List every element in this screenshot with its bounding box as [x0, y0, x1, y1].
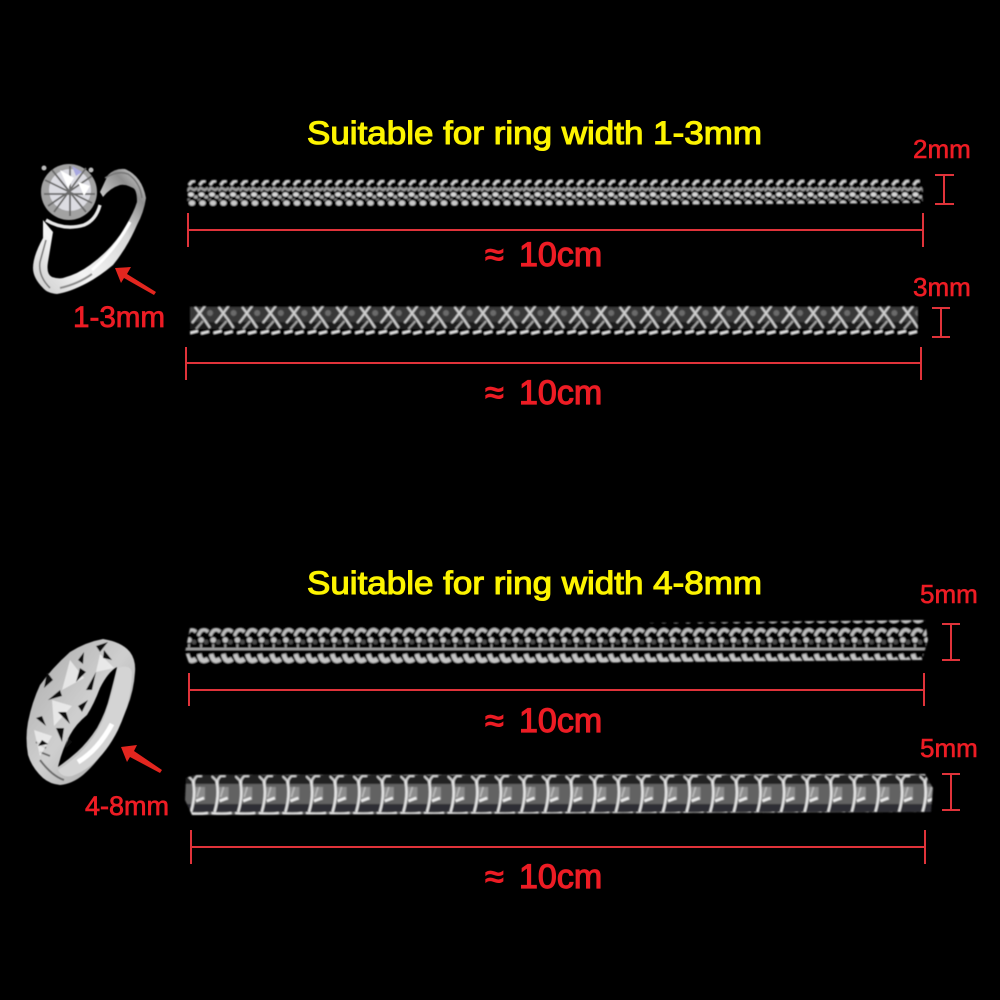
- spring: second 5mm: [185, 774, 933, 815]
- dimension: 2mm height: [935, 175, 954, 204]
- label: second 5mm: 5mm: [920, 733, 978, 763]
- label: about 10cm: 10cm: [519, 858, 602, 896]
- label: 2mm: 2mm: [913, 134, 971, 164]
- label: about 10cm: 10cm: [519, 702, 602, 740]
- label: first 5mm: 5mm: [920, 579, 978, 609]
- dimension: first 5mm height: [942, 624, 960, 660]
- label: about 10cm: 10cm: [519, 236, 602, 274]
- spring: 2mm: [187, 177, 923, 208]
- label: about 10cm: ≈: [485, 374, 504, 412]
- arrow: 1-3mm ring: [115, 267, 156, 295]
- heading: ring width 1-3mm: Suitable for ring width 1-3mm: [307, 115, 762, 151]
- label: about 10cm: ≈: [485, 858, 504, 896]
- label: 3mm: 3mm: [913, 272, 971, 302]
- spring: 3mm: [190, 306, 918, 337]
- label: about 10cm: ≈: [485, 236, 504, 274]
- dimension: 3mm height: [932, 308, 950, 337]
- dimension: 10cm length, second spring: [186, 347, 921, 380]
- arrow: 4-8mm ring: [121, 745, 162, 773]
- icon: patterned wide ring: [26, 639, 135, 785]
- spring: first 5mm: [185, 620, 928, 666]
- label: 4-8mm: 4-8mm: [85, 791, 169, 821]
- dimension: 10cm length, third spring: [189, 673, 924, 706]
- dimension: second 5mm height: [942, 774, 960, 810]
- label: about 10cm: 10cm: [519, 374, 602, 412]
- heading: ring width 4-8mm: Suitable for ring width 4-8mm: [307, 565, 762, 601]
- dimension: 10cm length, fourth spring: [191, 830, 925, 864]
- label: 1-3mm: 1-3mm: [73, 301, 165, 334]
- label: about 10cm: ≈: [485, 702, 504, 740]
- icon: solitaire diamond ring: [33, 164, 146, 294]
- dimension: 10cm length, first spring: [188, 213, 923, 247]
